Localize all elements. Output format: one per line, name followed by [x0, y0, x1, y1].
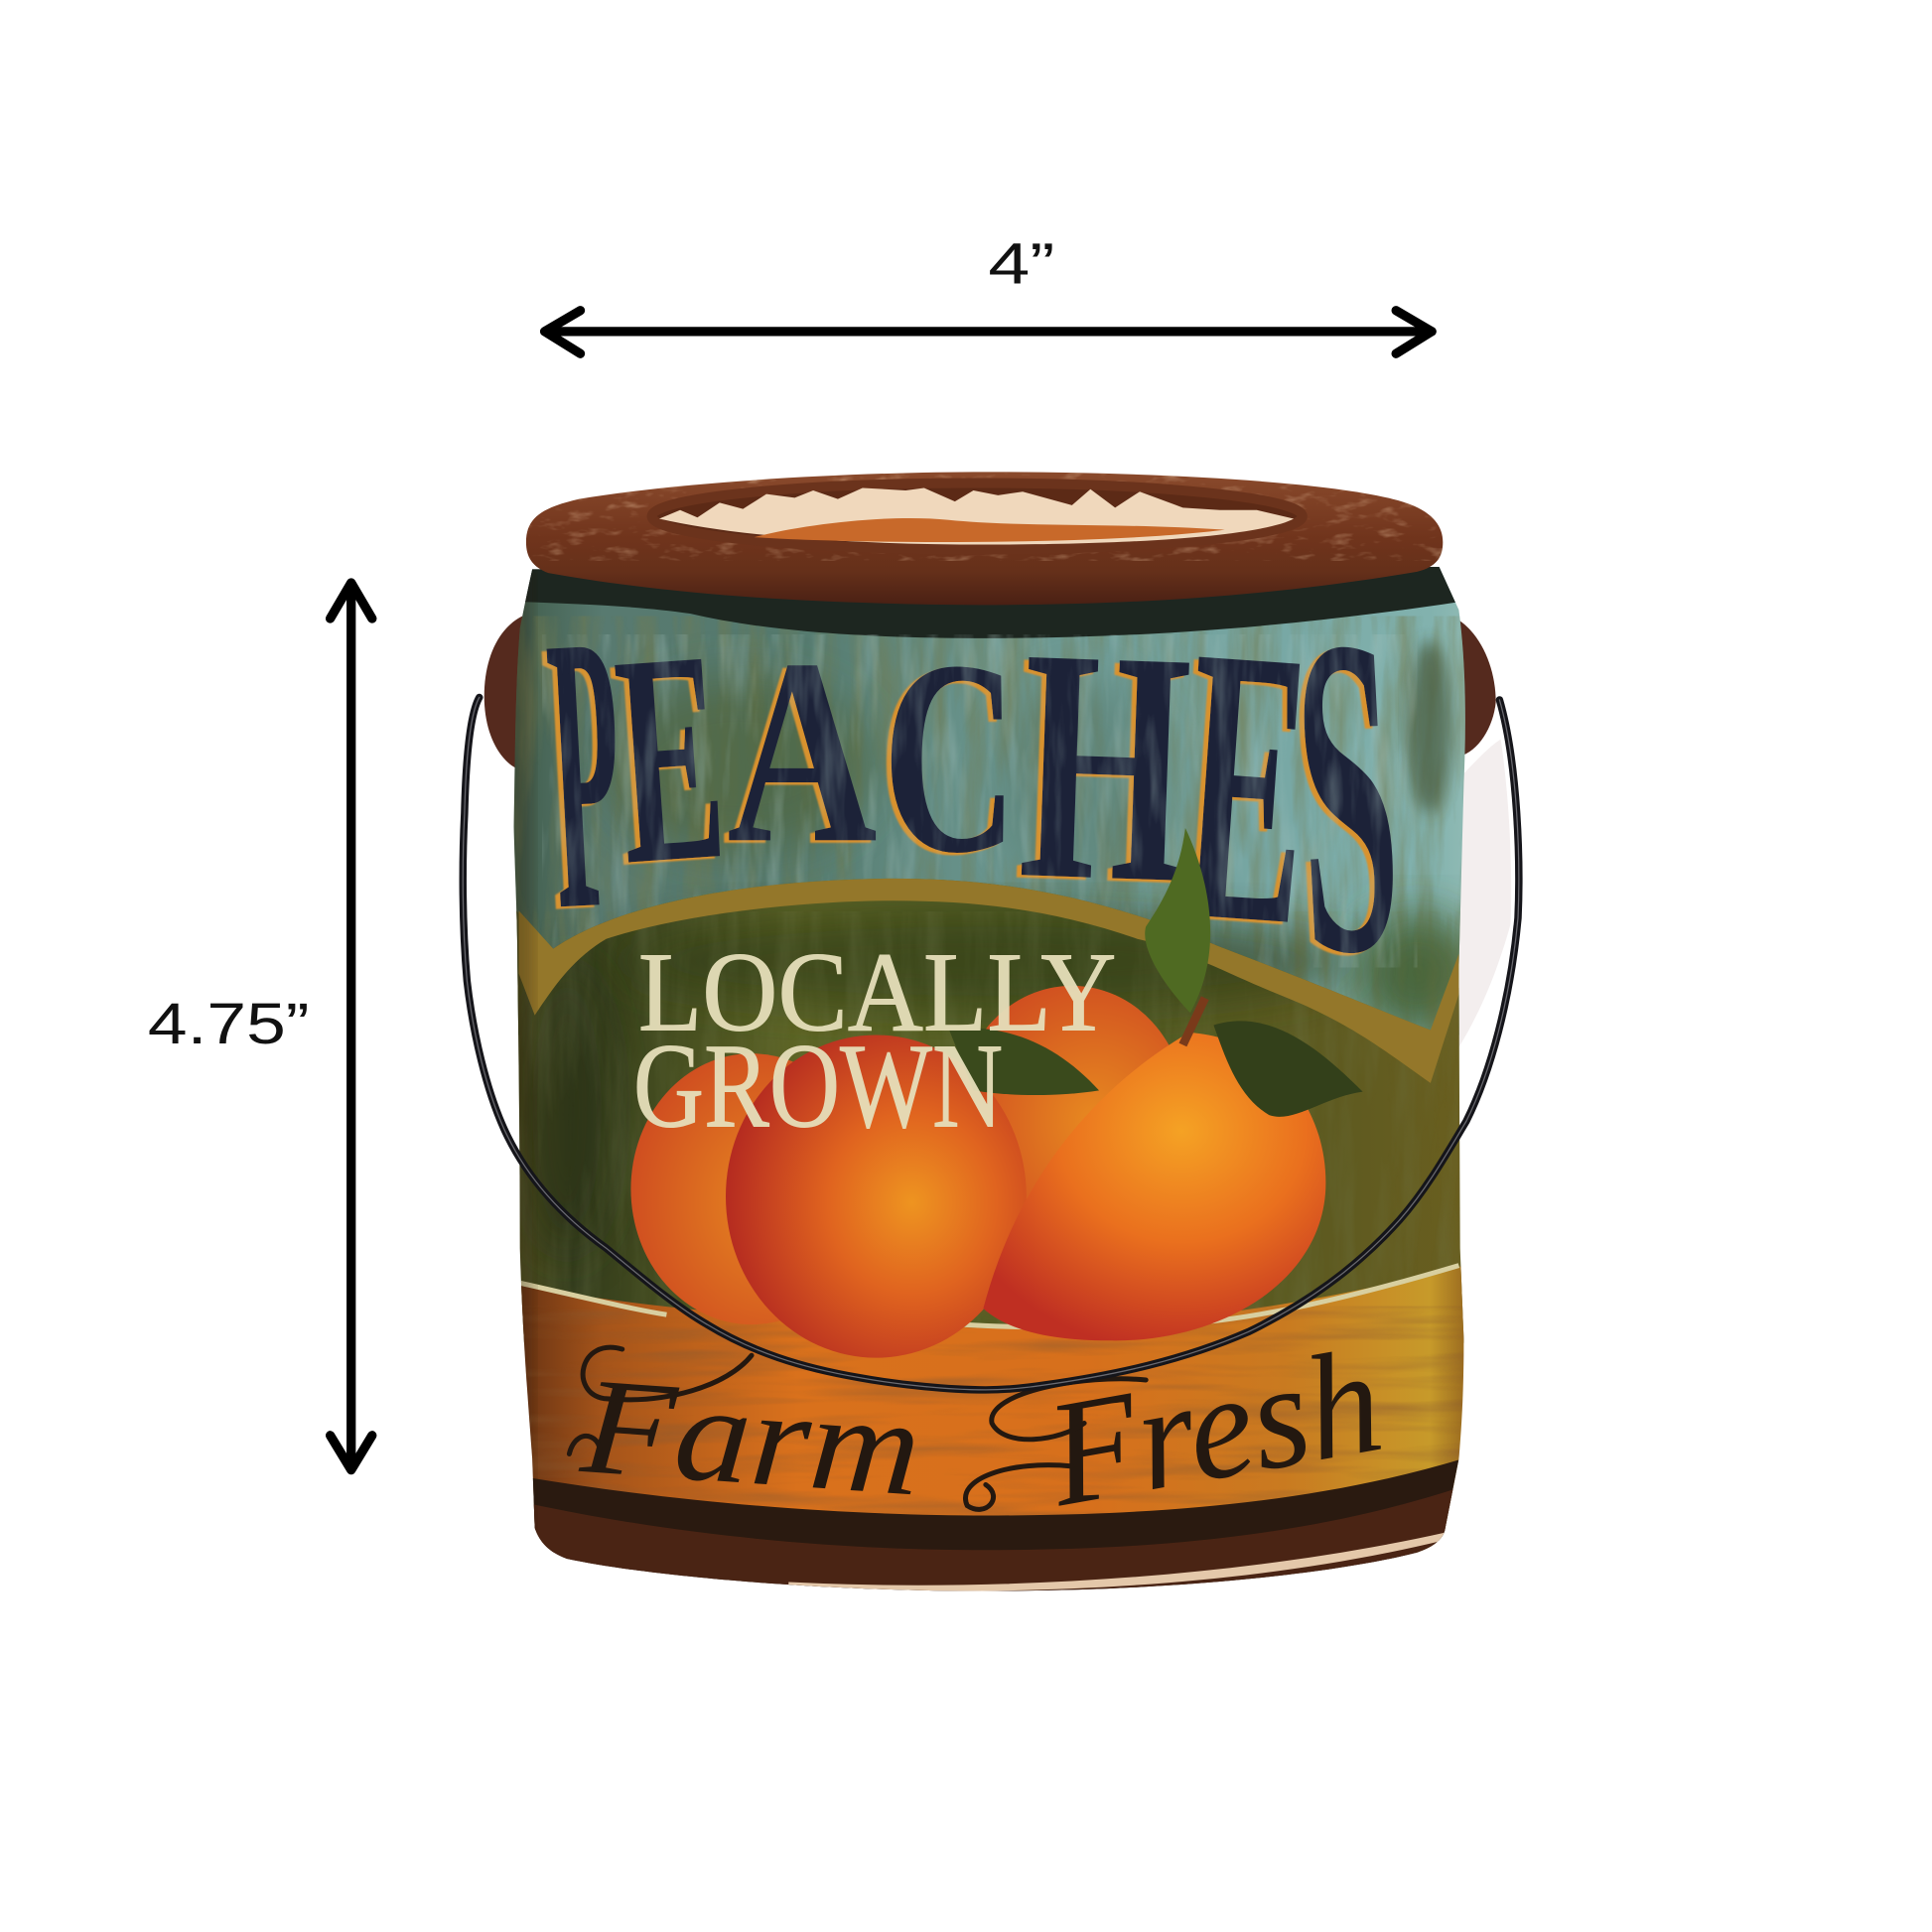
subtitle: GROWN: GROWN — [633, 1020, 1003, 1153]
title lettering: PEACHES: H — [1016, 579, 1195, 953]
rim opening — [659, 487, 1294, 545]
title lettering: PEACHES: C — [883, 604, 1018, 910]
peach: back left — [630, 1053, 793, 1324]
candle jar illustration — [463, 472, 1519, 1601]
title lettering: PEACHES: E — [1172, 564, 1322, 1008]
peach: front right — [983, 1033, 1325, 1340]
leaf: centre under text — [949, 1028, 1099, 1095]
leaf: top — [1145, 828, 1210, 1013]
wire handle — [463, 697, 1519, 1390]
rim outer — [526, 472, 1443, 605]
title lettering: PEACHES — [540, 647, 1393, 957]
weathering over title — [542, 634, 1417, 967]
peach: back centre — [986, 986, 1170, 1199]
cream foot sliver — [788, 1533, 1445, 1591]
arrow: horizontal width dimension — [545, 311, 1432, 353]
script swirls — [569, 1347, 1146, 1509]
jar body label: S — [1285, 541, 1410, 1050]
rim inner lip — [652, 483, 1303, 550]
arrow: vertical height dimension — [331, 583, 372, 1470]
jar rim — [526, 472, 1443, 605]
title lettering: PEACHES: E — [608, 587, 734, 928]
orange farm fresh band — [505, 1262, 1478, 1553]
gold banner edge — [518, 879, 1458, 1083]
ear: left handle lug — [484, 617, 522, 770]
subtitle: LOCALLY: LOCALLY — [638, 929, 1116, 1055]
peach: front left — [726, 1035, 1027, 1358]
height label: 4.75 inches: 4.75” — [148, 992, 310, 1056]
brown base — [534, 1489, 1453, 1590]
peach stem — [1182, 998, 1205, 1044]
cream divider line — [518, 1266, 1458, 1327]
leaf: right — [1213, 1021, 1363, 1117]
title lettering: PEACHES: A — [727, 604, 878, 897]
edge shading — [514, 582, 538, 1478]
teal top panel — [505, 567, 1478, 1035]
width label: 4 inches: 4” — [988, 231, 1054, 296]
ear: right handle lug — [1451, 617, 1496, 757]
title lettering: PEACHES: P — [540, 552, 631, 992]
shadow gap behind handle — [1458, 740, 1511, 1047]
olive lower panel — [505, 879, 1478, 1343]
script: Fresh: Fresh — [1035, 1315, 1393, 1538]
top dark band — [525, 566, 1455, 638]
jar body label — [505, 541, 1478, 1601]
rim weathering — [526, 472, 1443, 561]
script: Farm: Farm — [576, 1349, 925, 1526]
bottom dark band — [532, 1459, 1459, 1590]
wax surface — [755, 518, 1225, 542]
